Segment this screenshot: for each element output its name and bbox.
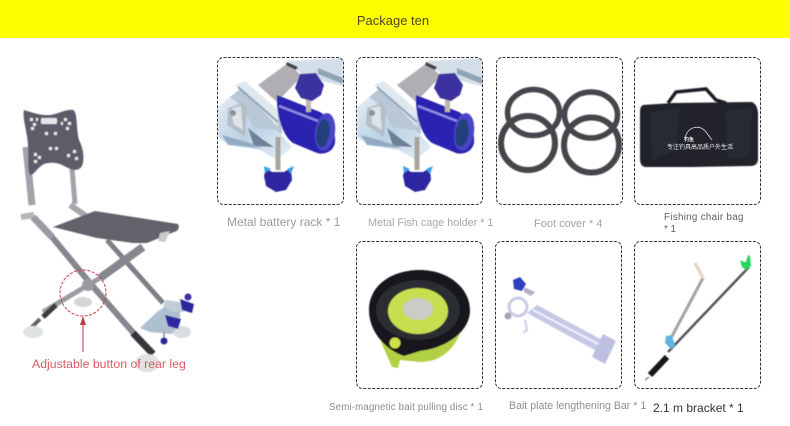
label: 2.1 m bracket: 2.1 m bracket * 1	[653, 401, 744, 415]
bag handle	[668, 89, 726, 103]
disc magnet	[403, 298, 433, 320]
bag logo	[685, 127, 712, 140]
disc button	[390, 338, 400, 348]
label: fishing chair bag	[664, 212, 744, 235]
rear leg feet	[23, 326, 43, 338]
panel: semi-magnetic bait pulling disc	[356, 242, 482, 388]
panel: 2.1 m bracket	[634, 242, 760, 388]
label: metal battery rack: Metal battery rack * 1	[227, 215, 341, 229]
bracket handle	[650, 357, 667, 375]
chair annotation: Adjustable button of rear leg	[32, 357, 186, 371]
label: fishing chair bag: * 1	[664, 224, 676, 235]
label: bait plate lengthening bar: Bait plate lengthening Bar * 1	[509, 400, 646, 412]
header banner	[0, 0, 790, 38]
panel: fishing chair bag: 钓鱼	[684, 136, 694, 143]
panel: metal fish cage holder	[356, 58, 482, 204]
bar knob	[513, 277, 526, 291]
backrest	[24, 110, 83, 175]
frame pivot	[82, 279, 94, 291]
disc black rim	[369, 270, 470, 356]
bag body	[640, 102, 758, 167]
bag slogan: 专注钓具高品质户外生活	[667, 143, 733, 151]
arrow	[80, 316, 86, 352]
heading: Package ten	[357, 13, 429, 28]
label: foot cover: Foot cover * 4	[534, 218, 602, 230]
product photo: fishing chair	[21, 110, 194, 372]
bracket green tip	[740, 255, 751, 270]
bracket long rod	[668, 267, 749, 352]
panel: bait plate lengthening bar	[496, 242, 622, 388]
bar ring	[509, 298, 527, 316]
disc green base	[375, 325, 463, 368]
bracket short arm	[671, 278, 703, 338]
seat end cap	[158, 231, 170, 242]
bar tube	[527, 305, 606, 353]
label: fishing chair bag: Fishing chair bag	[664, 212, 744, 223]
bar end plate	[592, 334, 616, 364]
chair uprights and frame	[21, 147, 153, 354]
bracket clip	[665, 335, 675, 349]
disc green centre	[388, 288, 448, 334]
dashed highlight circle	[60, 270, 106, 316]
panel: metal battery rack	[218, 58, 344, 204]
rear rod of chair	[107, 240, 163, 303]
panel: foot cover	[496, 58, 622, 204]
label: metal fish cage holder: Metal Fish cage holder * 1	[368, 217, 493, 229]
chair clamps	[140, 306, 180, 334]
backrest holes	[30, 118, 78, 163]
label: semi-magnetic bait pulling disc: Semi-magnetic bait pulling disc * 1	[329, 402, 483, 413]
seat	[53, 211, 179, 243]
panel: fishing chair bag	[634, 58, 760, 204]
